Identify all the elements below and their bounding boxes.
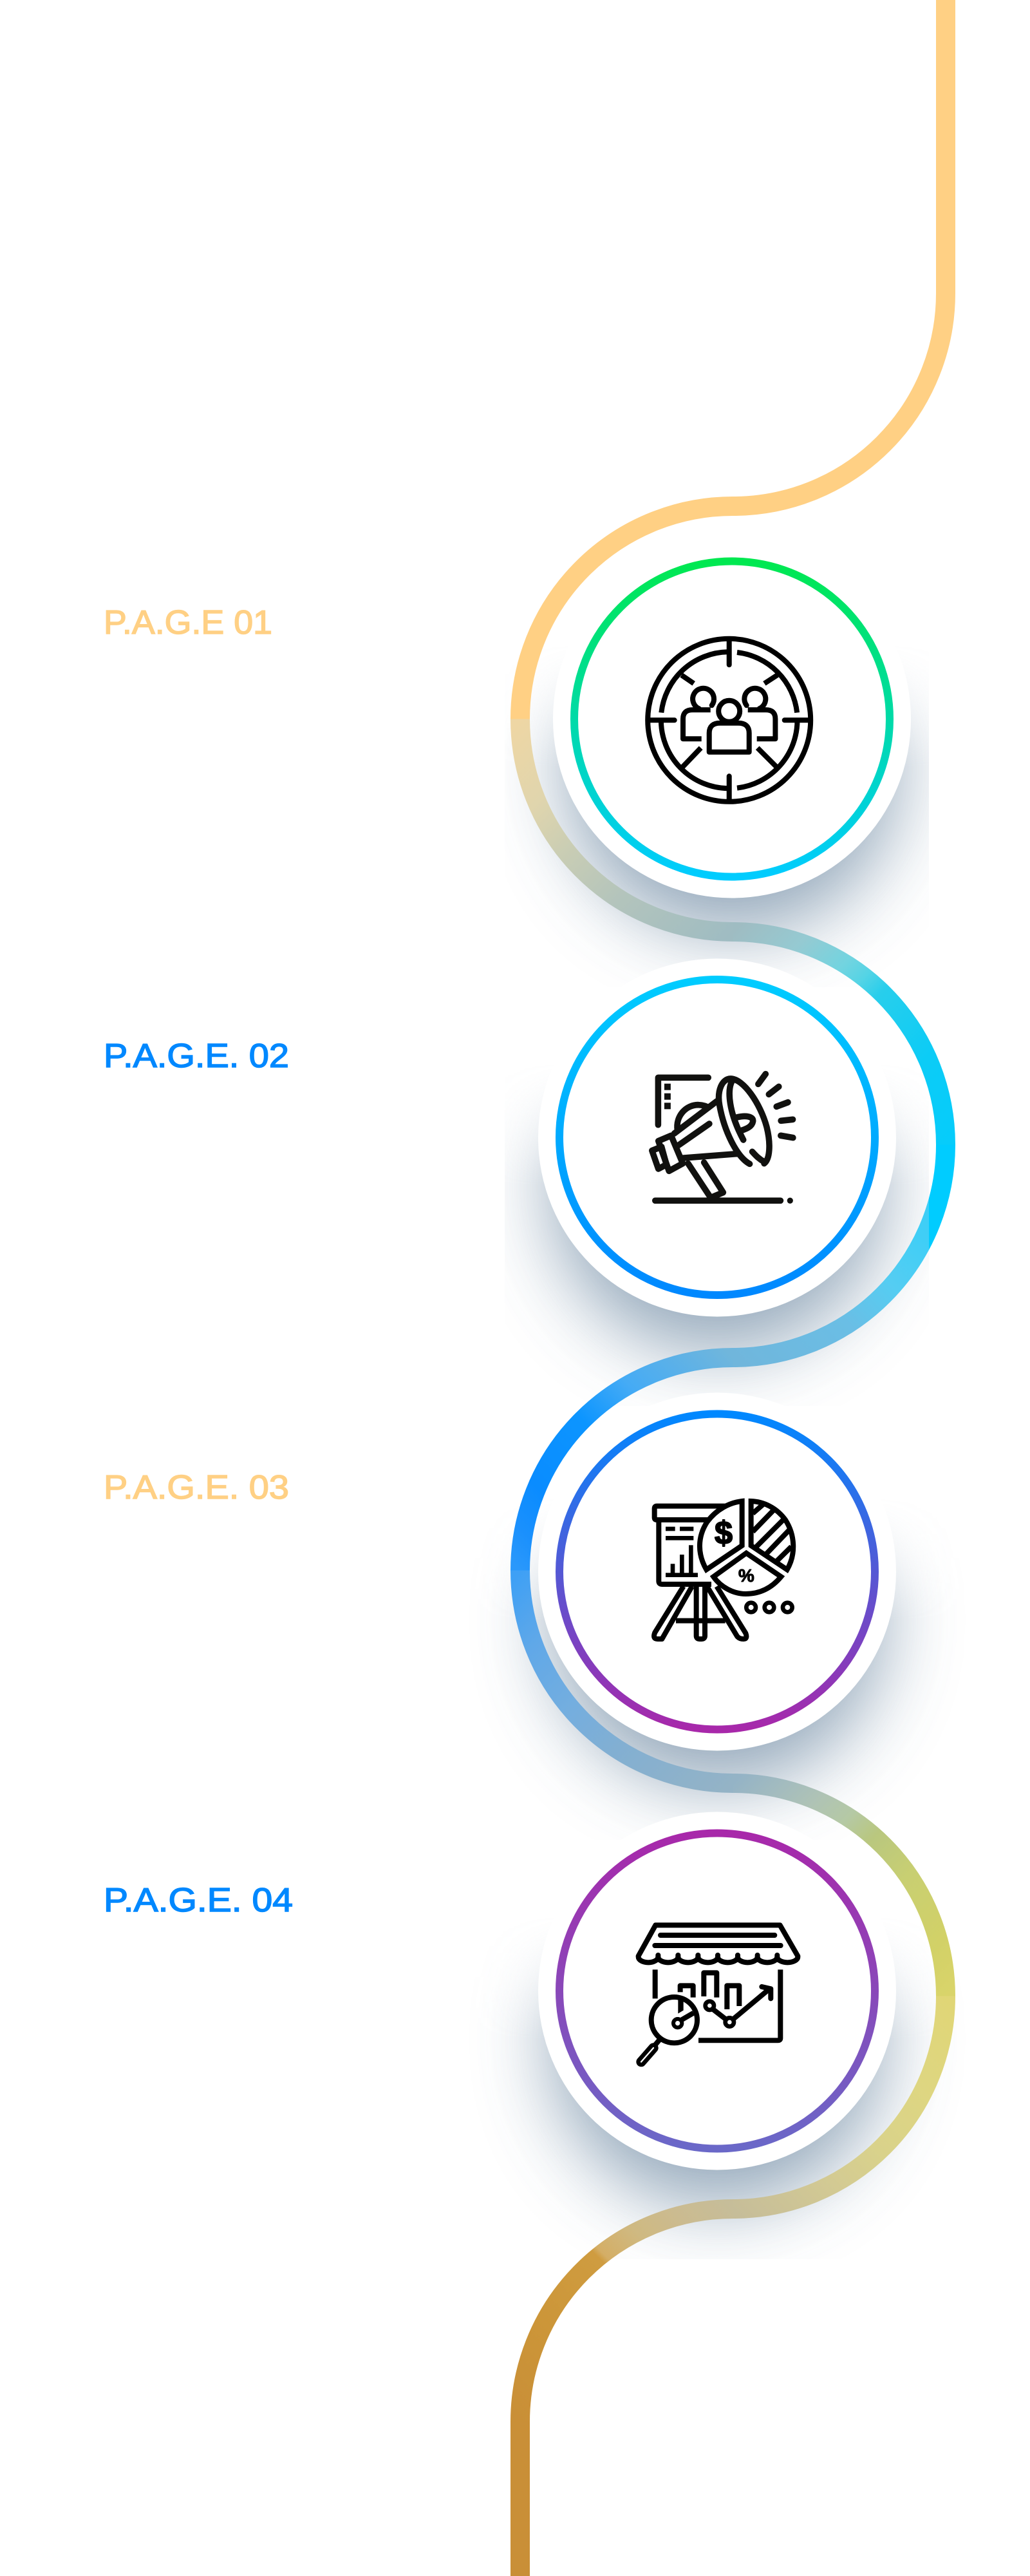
label: page 02: P.A.G.E. 02 — [104, 1037, 289, 1075]
shadow: node 2 — [551, 1019, 883, 1352]
white disc 1 — [553, 540, 911, 898]
icon: target audience — [648, 639, 810, 802]
shadow: node 1 — [566, 601, 898, 933]
icon: store with analytics — [639, 1925, 798, 2062]
gradient ring 3 — [559, 1414, 875, 1730]
node 4: store analytics — [538, 1812, 896, 2170]
label: page 01: P.A.G.E 01 — [104, 604, 272, 641]
white disc 4 — [538, 1812, 896, 2170]
icon: megaphone — [652, 1074, 793, 1204]
node 1: target audience — [553, 540, 911, 898]
shadow: node 4 — [551, 1873, 883, 2205]
winding gradient ribbon — [520, 0, 946, 2576]
white disc 2 — [538, 958, 896, 1316]
dollar sign: $ — [715, 1515, 733, 1551]
gradient ring 2 — [559, 980, 875, 1295]
gradient ring 4 — [559, 1833, 875, 2148]
percent sign: % — [738, 1566, 754, 1586]
icon: presentation with pie chart — [654, 1501, 793, 1639]
node 3: presentation chart — [538, 1392, 896, 1750]
gradient ring 1 — [574, 562, 890, 877]
node 2: megaphone — [538, 958, 896, 1316]
label: page 03: P.A.G.E. 03 — [104, 1469, 289, 1506]
white disc 3 — [538, 1392, 896, 1750]
label: page 04: P.A.G.E. 04 — [104, 1882, 293, 1919]
shadow: node 3 — [551, 1454, 883, 1786]
